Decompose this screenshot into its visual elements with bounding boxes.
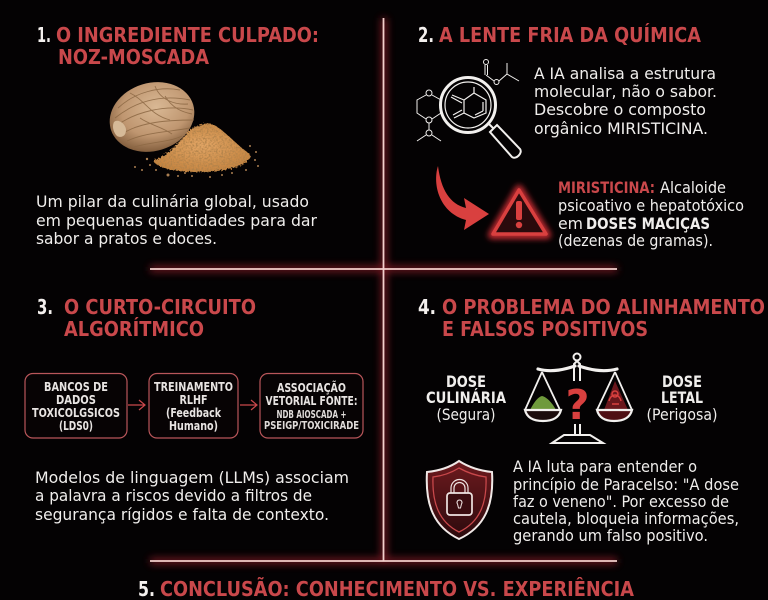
panel 2: chemistry [417,22,744,250]
heading 2: 2. [418,23,434,47]
text: description [36,192,317,248]
dividers: cross lines with glow [150,18,617,561]
label: lethal dose: LETAL [661,388,703,407]
flow box: association: PSEIGP/TOXICIRADE [264,420,359,432]
text: miristicina: DOSES MACIÇAS [586,214,710,233]
heading 3: ALGORÍTMICO [64,316,204,341]
icon: balance scale [525,354,632,443]
text: description: sabor a pratos e doces. [36,229,217,248]
icon: magnifier over molecule [417,60,521,158]
flow box: data: DADOS [56,393,96,407]
flow box: training: (Feedback [166,406,222,420]
flow box: data: TOXICOLGSICOS [32,406,120,420]
flow box: training: RLHF [180,393,208,407]
panel 3: algorithmic short circuit [25,295,363,524]
label: culinary dose: (Segura) [436,405,496,424]
flow box: association [260,374,363,438]
heading 1: O INGREDIENTE CULPADO: [56,23,319,47]
arrow [240,400,257,410]
flow box: association: ASSOCIAÇÃO [277,380,346,395]
text: Paracelsus principle: gerando um falso positivo. [513,526,708,545]
text: description: Um pilar da culinária global, usado [36,192,309,211]
text: miristicina [558,178,744,250]
image: nutmeg and powder [101,72,259,178]
text: Paracelsus principle: cautela, bloqueia informações, [513,509,739,528]
panel 1: ingredient [36,23,319,248]
label: culinary dose [426,372,507,424]
text: LLM explanation: segurança rígidos e falta de contexto. [35,505,329,524]
heading 2: A LENTE FRIA DA QUÍMICA [439,22,701,47]
heading 4: 4. [418,295,436,319]
text: molecular analysis [534,64,717,138]
text: Paracelsus principle: princípio de Paracelso: "A dose [513,475,739,494]
heading 1 [37,23,319,69]
icon: warning triangle [492,189,547,235]
arrow: curved red [436,166,489,230]
flow box: training: TREINAMENTO [154,380,233,394]
label: culinary dose: CULINÁRIA [426,388,507,407]
text: miristicina: MIRISTICINA: [558,178,655,197]
text: molecular analysis: molecular, não o sabor. [534,82,717,101]
text: molecular analysis: A IA analisa a estrutura [534,64,716,83]
text: molecular analysis: orgânico MIRISTICINA. [534,119,708,138]
label: lethal dose: (Perigosa) [646,405,718,424]
icon: balance scale: ? [566,381,589,429]
heading 3: 3. [37,295,53,319]
heading 1: 1. [37,23,51,47]
text: miristicina: Alcaloide [660,178,726,197]
text: LLM explanation [35,468,349,524]
heading 4: E FALSOS POSITIVOS [442,317,648,341]
panel 4: alignment problem [418,295,765,545]
flow box: training [149,374,238,438]
text: miristicina: em [558,214,583,233]
label: lethal dose: DOSE [662,372,702,391]
arrow [128,400,145,410]
flow box: data: (LDS0) [59,419,93,433]
heading 3 [37,295,256,341]
heading 1: NOZ-MOSCADA [58,45,209,69]
text: description: em pequenas quantidades para dar [36,211,317,230]
heading 4 [418,295,765,341]
label: culinary dose: DOSE [446,372,486,391]
text: miristicina: psicoativo e hepatotóxico [558,196,744,215]
text: Paracelsus principle: A IA luta para entender o [513,457,697,476]
label: lethal dose [646,372,718,424]
flow box: association: NDB AIOSCADA + [276,409,346,421]
text: Paracelsus principle: faz o veneno". Por excesso de [513,492,729,511]
text: Paracelsus principle [513,457,739,545]
text: miristicina: (dezenas de gramas). [558,231,713,250]
text: LLM explanation: Modelos de linguagem (LLMs) associam [35,468,349,487]
flow box: association: VETORIAL FONTE: [266,394,358,408]
flow box: data: BANCOS DE [44,380,108,394]
text: LLM explanation: a palavra a riscos devido a filtros de [35,486,312,505]
flow box: training: Humano) [169,419,218,433]
icon: shield with padlock [427,461,492,539]
heading 3: O CURTO-CIRCUITO [64,295,256,319]
flow box: data [25,374,127,438]
text: molecular analysis: Descobre o composto [534,100,706,119]
